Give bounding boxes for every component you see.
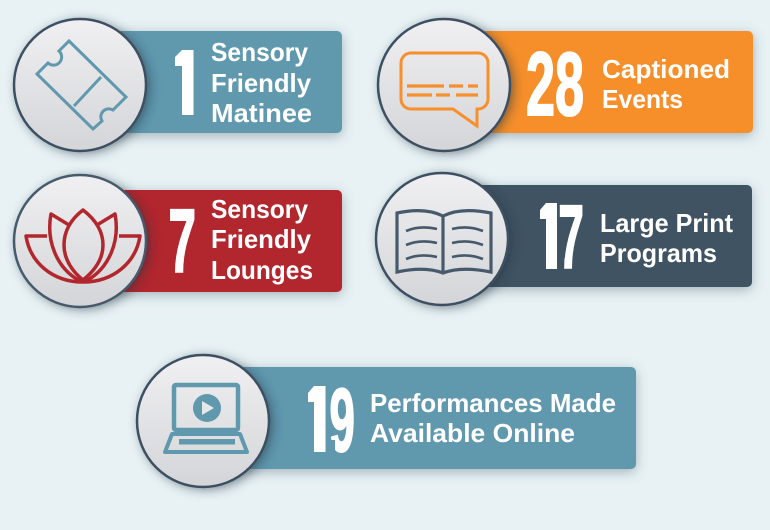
number: 1: 1 [176, 33, 206, 133]
label: performances made available online: Available Online [370, 418, 575, 448]
panel: large print programs [376, 173, 752, 305]
panel: sensory friendly matinee [14, 19, 342, 151]
number: 17 [540, 203, 582, 269]
label: performances made available online [370, 388, 616, 448]
label: captioned events: Captioned [602, 54, 730, 84]
icon circle: matinee [14, 19, 146, 151]
label: large print programs [600, 208, 733, 268]
label: sensory friendly matinee: Matinee [211, 98, 312, 128]
panel: captioned events [378, 19, 753, 151]
panel: performances online [137, 355, 636, 487]
label: large print programs: Large Print [600, 208, 733, 238]
label: sensory friendly lounges: Sensory [211, 194, 309, 224]
icon circle: online [137, 355, 269, 487]
label: performances made available online: Performances Made [370, 388, 616, 418]
icon: open book [397, 211, 491, 273]
panel background: large print [470, 185, 752, 287]
icon circle: large print [376, 173, 508, 305]
panel background: lounges [110, 190, 342, 292]
number: 19 [308, 386, 354, 453]
panel background: matinee [110, 31, 342, 133]
label: captioned events [602, 54, 730, 114]
label: sensory friendly lounges: Friendly [211, 224, 312, 254]
number: 1 [175, 50, 194, 115]
number: 7: 7 [168, 191, 196, 292]
icon: lotus [26, 210, 140, 282]
number: 28: 28 [526, 33, 584, 135]
label: sensory friendly matinee [211, 37, 312, 128]
icon: laptop with play button [165, 385, 247, 452]
number: 17: 17 [540, 187, 584, 288]
number: 19: 19 [308, 370, 355, 471]
icon circle: captioned [378, 19, 510, 151]
panel: sensory friendly lounges [14, 175, 342, 307]
label: sensory friendly lounges: Lounges [211, 255, 313, 285]
label: large print programs: Programs [600, 238, 717, 268]
icon circle: lounges [14, 175, 146, 307]
label: sensory friendly matinee: Sensory [211, 37, 309, 67]
icon: ticket [37, 41, 126, 129]
panel background: online [230, 367, 636, 469]
label: sensory friendly matinee: Friendly [211, 68, 312, 98]
panel background: captioned [470, 31, 753, 133]
label: sensory friendly lounges [211, 194, 313, 285]
icon: speech bubble [401, 53, 488, 126]
label: captioned events: Events [602, 84, 683, 114]
